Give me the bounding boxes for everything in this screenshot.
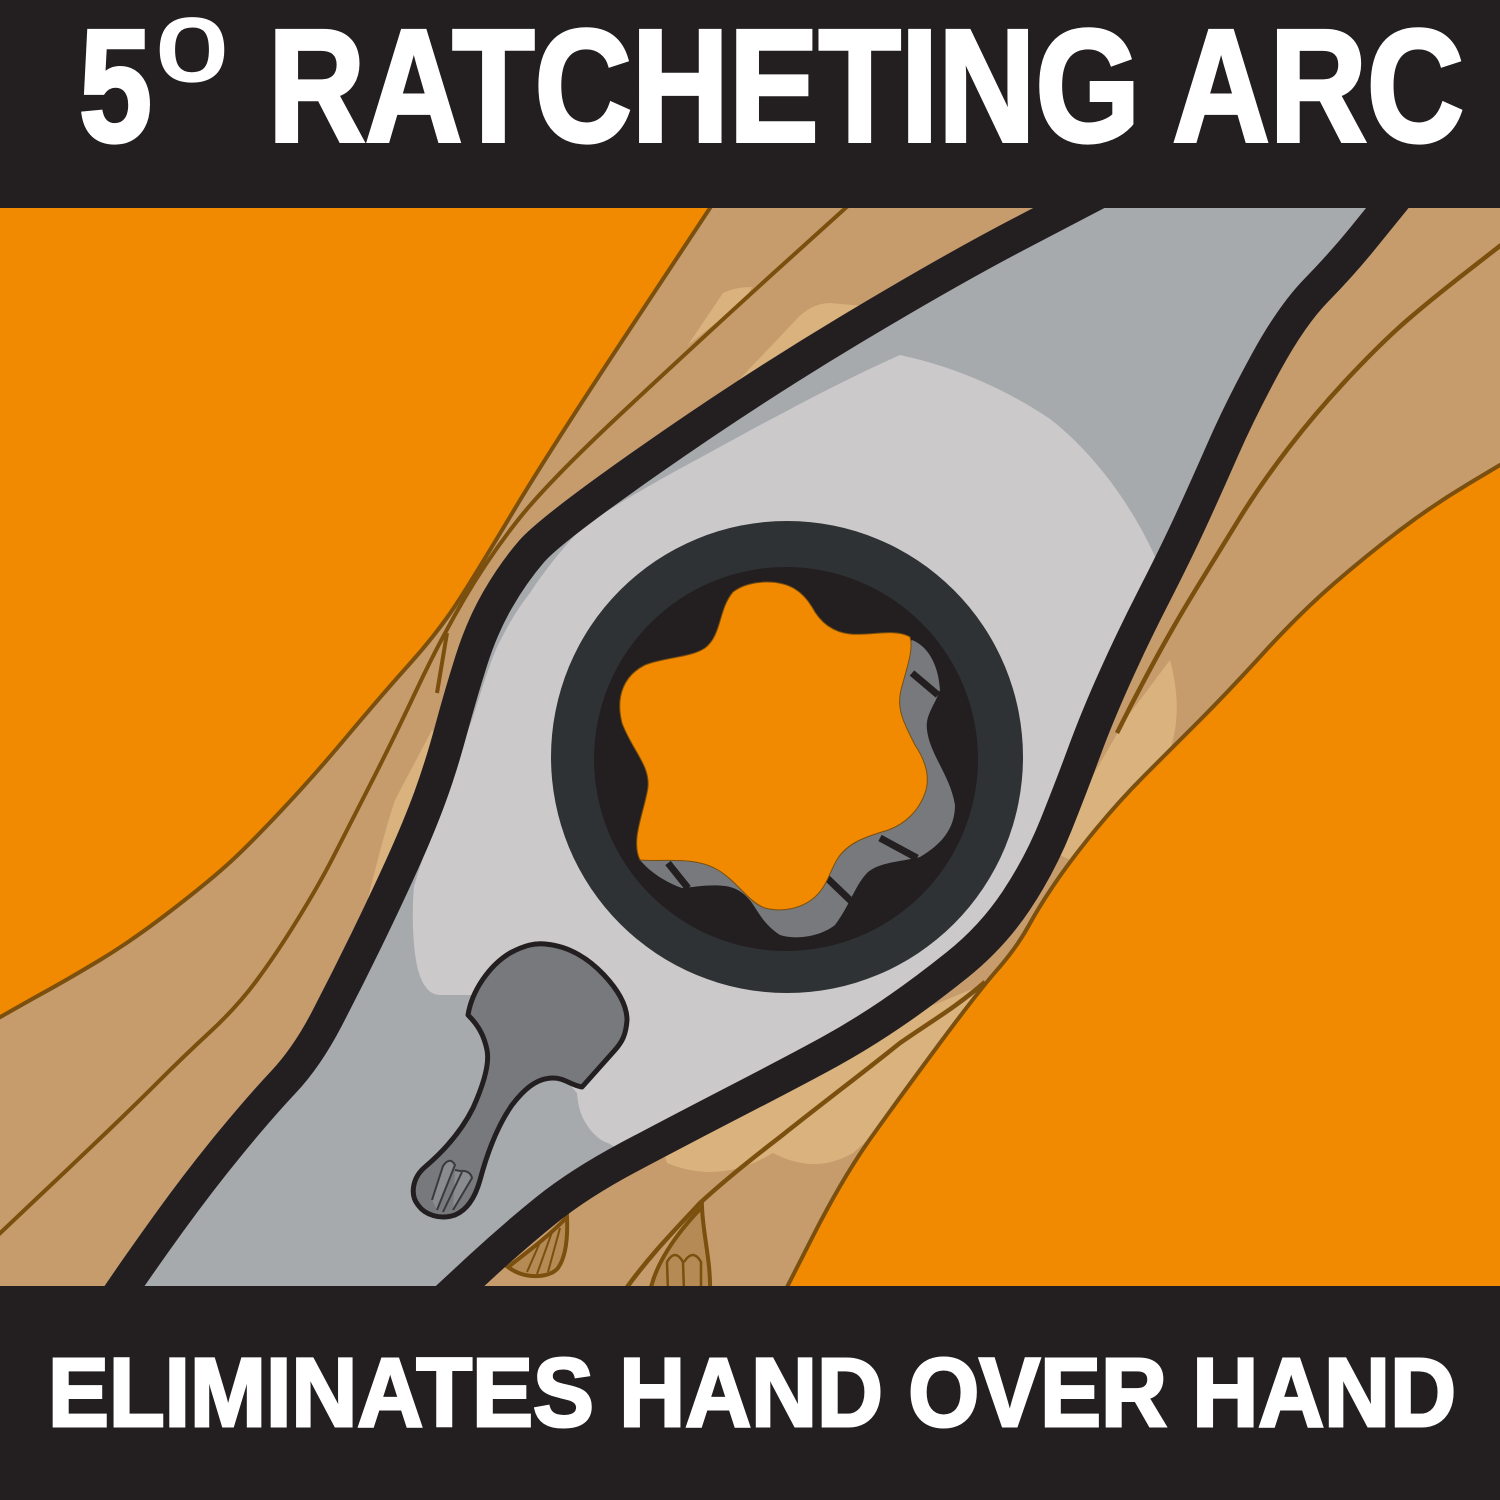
tooth dividers: [668, 673, 938, 902]
fingernail: left: [508, 1217, 567, 1276]
finger line: [0, 204, 850, 1238]
subtitle: ELIMINATES HAND OVER HAND: [48, 1338, 1456, 1447]
finger lines: [625, 242, 1500, 1290]
wrench head: light plate: [413, 355, 1175, 1156]
socket opening: [620, 582, 927, 910]
top banner: [0, 0, 1500, 208]
title: 5: [79, 0, 152, 175]
highlight: knuckles: [365, 287, 885, 910]
fingernail: right: [650, 1207, 710, 1292]
orange background: [0, 200, 1500, 1295]
bottom banner: [0, 1286, 1500, 1500]
ratchet ring: [551, 521, 1023, 993]
highlight: palm: [660, 660, 1177, 1172]
wrench body: [115, 176, 1410, 1300]
wrench border: [115, 176, 1410, 1300]
direction lever: [413, 944, 627, 1217]
hand: left side: [0, 200, 1100, 1300]
hand outline: [783, 462, 1500, 1295]
hand: right side: [430, 200, 1500, 1295]
gear teeth: [640, 640, 955, 937]
illustration: hand and wrench: [0, 176, 1500, 1300]
lever grip: [432, 1161, 472, 1212]
